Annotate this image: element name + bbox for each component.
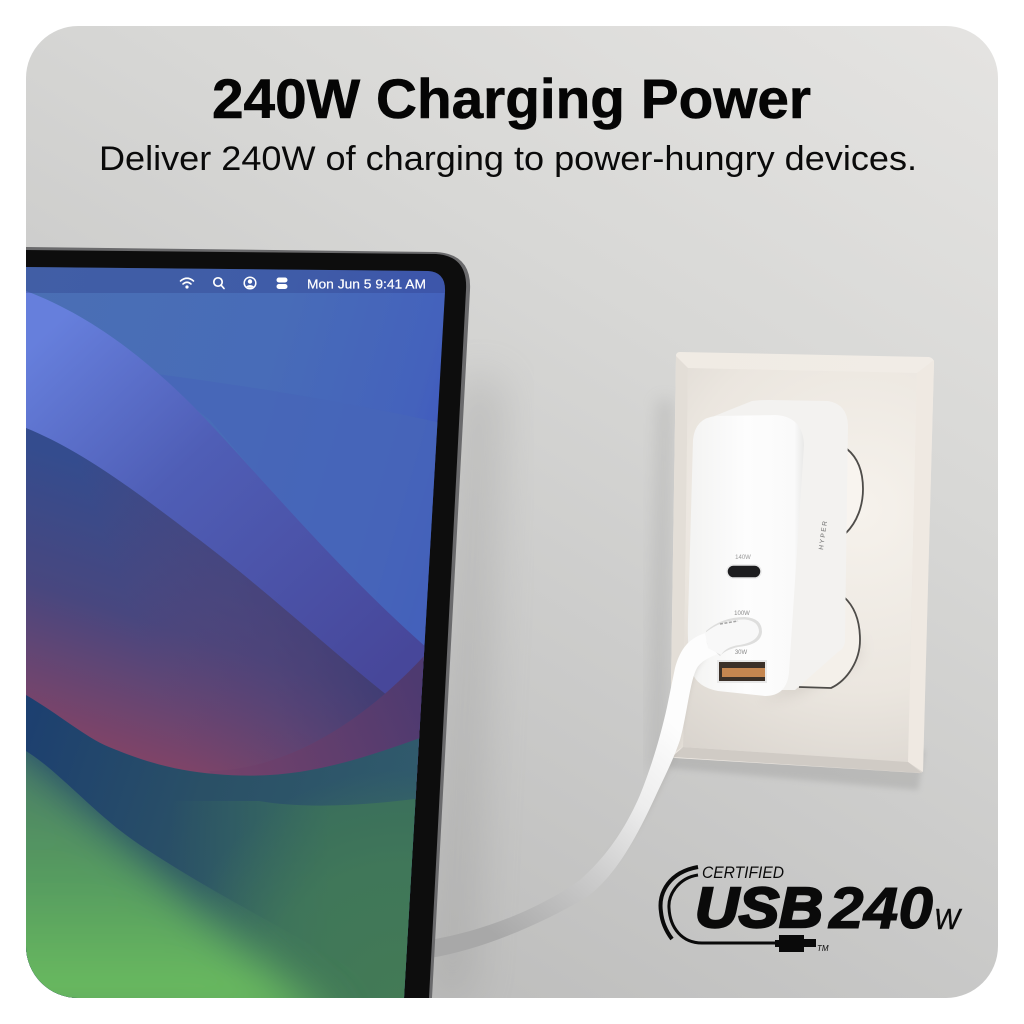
- charger front face: [688, 415, 804, 696]
- wave: purple overlap: [312, 656, 424, 762]
- wave: dark blue to red band: [26, 428, 450, 800]
- icon: control centre: [276, 278, 288, 289]
- logo USB text: USB: [695, 876, 823, 940]
- logo certified text: CERTIFIED: [702, 864, 784, 882]
- wave: light green field: [26, 751, 334, 998]
- icon: user: [244, 277, 256, 289]
- logo trademark: TM: [817, 944, 829, 953]
- wave: teal band: [26, 695, 450, 1000]
- cable: white charging lead: [430, 633, 723, 958]
- port label 30W: 30W: [735, 650, 748, 656]
- charger side: [712, 400, 848, 690]
- menu bar clock: Mon Jun 5 9:41 AM: [307, 278, 426, 292]
- display body edge: [26, 247, 470, 998]
- black bezel: [26, 250, 466, 998]
- icon: search: [214, 278, 224, 288]
- logo W text: W: [934, 904, 962, 936]
- logo arcs and cable: [661, 867, 780, 943]
- menu bar icons: [180, 277, 426, 292]
- menu bar: [26, 267, 451, 293]
- laptop display: [0, 247, 470, 1024]
- title: 240W Charging Power: [212, 67, 811, 130]
- wave: periwinkle band: [26, 291, 450, 800]
- socket discs behind charger: [799, 449, 863, 688]
- logo 240 text: 240: [828, 876, 933, 941]
- USB-A port: [717, 660, 767, 683]
- screen wallpaper: [26, 267, 446, 998]
- charger: [688, 400, 863, 700]
- icon: wifi: [180, 278, 194, 288]
- brand mark: HYPER: [818, 519, 829, 550]
- cable connector: [705, 617, 762, 656]
- wave: dark green field: [210, 798, 416, 998]
- wall plate: [668, 352, 934, 790]
- port label 100W: 100W: [734, 611, 750, 617]
- port label 140W: 140W: [735, 555, 751, 561]
- USB certified 240W logo: [661, 864, 962, 953]
- subtitle: Deliver 240W of charging to power-hungry devices.: [99, 140, 917, 178]
- USB-C port: [727, 565, 761, 578]
- logo plug: [775, 935, 816, 952]
